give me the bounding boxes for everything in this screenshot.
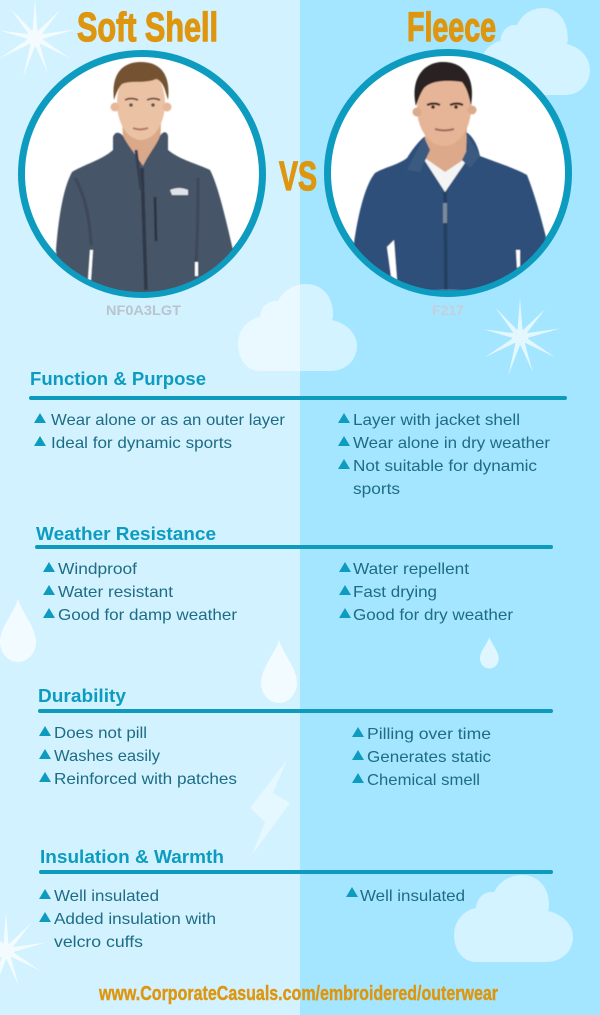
right list: Water repellent — [353, 561, 470, 578]
title: Soft Shell: Soft Shell — [77, 4, 218, 50]
left list: Ideal for dynamic sports — [51, 435, 232, 452]
decorative cloud top right — [480, 8, 590, 95]
left list: Wear alone or as an outer layer — [51, 412, 286, 429]
right list: Layer with jacket shell — [353, 412, 520, 429]
heading: Weather Resistance — [36, 524, 216, 544]
left list: Well insulated — [54, 888, 159, 905]
right list: Chemical smell — [367, 772, 480, 789]
left list — [34, 412, 286, 452]
right list: Good for dry weather — [353, 607, 514, 624]
left list: Water resistant — [58, 584, 174, 601]
left background panel — [0, 0, 300, 1015]
left list: Added insulation with — [54, 911, 216, 928]
left list: Reinforced with patches — [54, 771, 237, 788]
left list — [43, 561, 238, 624]
right list — [338, 412, 551, 498]
portrait: fleece jacket — [328, 52, 568, 294]
left list — [39, 888, 216, 951]
decorative cloud center — [238, 284, 357, 371]
left list: Washes easily — [54, 748, 160, 765]
right list: Wear alone in dry weather — [353, 435, 551, 452]
section: insulation and warmth — [39, 847, 553, 951]
heading: Insulation & Warmth — [40, 847, 224, 867]
left list: Windproof — [58, 561, 138, 578]
left list: velcro cuffs — [54, 934, 143, 951]
title: Fleece: Fleece — [407, 4, 496, 50]
right list: Fast drying — [353, 584, 437, 601]
right list: Pilling over time — [367, 726, 491, 743]
right list — [352, 726, 491, 789]
footer url: www.CorporateCasuals.com/embroidered/outerwear — [98, 983, 498, 1005]
left list: Does not pill — [54, 725, 147, 742]
decorative drop left — [0, 599, 36, 662]
right list: sports — [353, 481, 400, 498]
decorative drop right — [480, 637, 499, 668]
section: weather resistance — [35, 524, 553, 624]
decorative star bottom left — [0, 912, 47, 990]
left list — [39, 725, 237, 788]
section: function and purpose — [29, 369, 567, 498]
decorative drop center — [261, 640, 297, 703]
decorative star top left — [0, 0, 76, 77]
decorative star right — [483, 298, 561, 376]
right list — [339, 561, 514, 624]
left list: Good for damp weather — [58, 607, 238, 624]
heading: Function & Purpose — [30, 369, 206, 389]
VS label: VS — [279, 153, 317, 199]
decorative lightning bolt — [250, 760, 290, 855]
decorative cloud bottom right — [454, 875, 573, 962]
model code NF0A3LGT: NF0A3LGT — [106, 302, 181, 318]
heading: Durability — [38, 686, 126, 706]
right background panel — [300, 0, 600, 1015]
model code F217: F217 — [432, 302, 464, 318]
section: durability — [38, 686, 553, 789]
right list: Generates static — [367, 749, 491, 766]
portrait: soft shell jacket — [22, 54, 262, 300]
right list: Well insulated — [360, 888, 465, 905]
right list: Not suitable for dynamic — [353, 458, 537, 475]
